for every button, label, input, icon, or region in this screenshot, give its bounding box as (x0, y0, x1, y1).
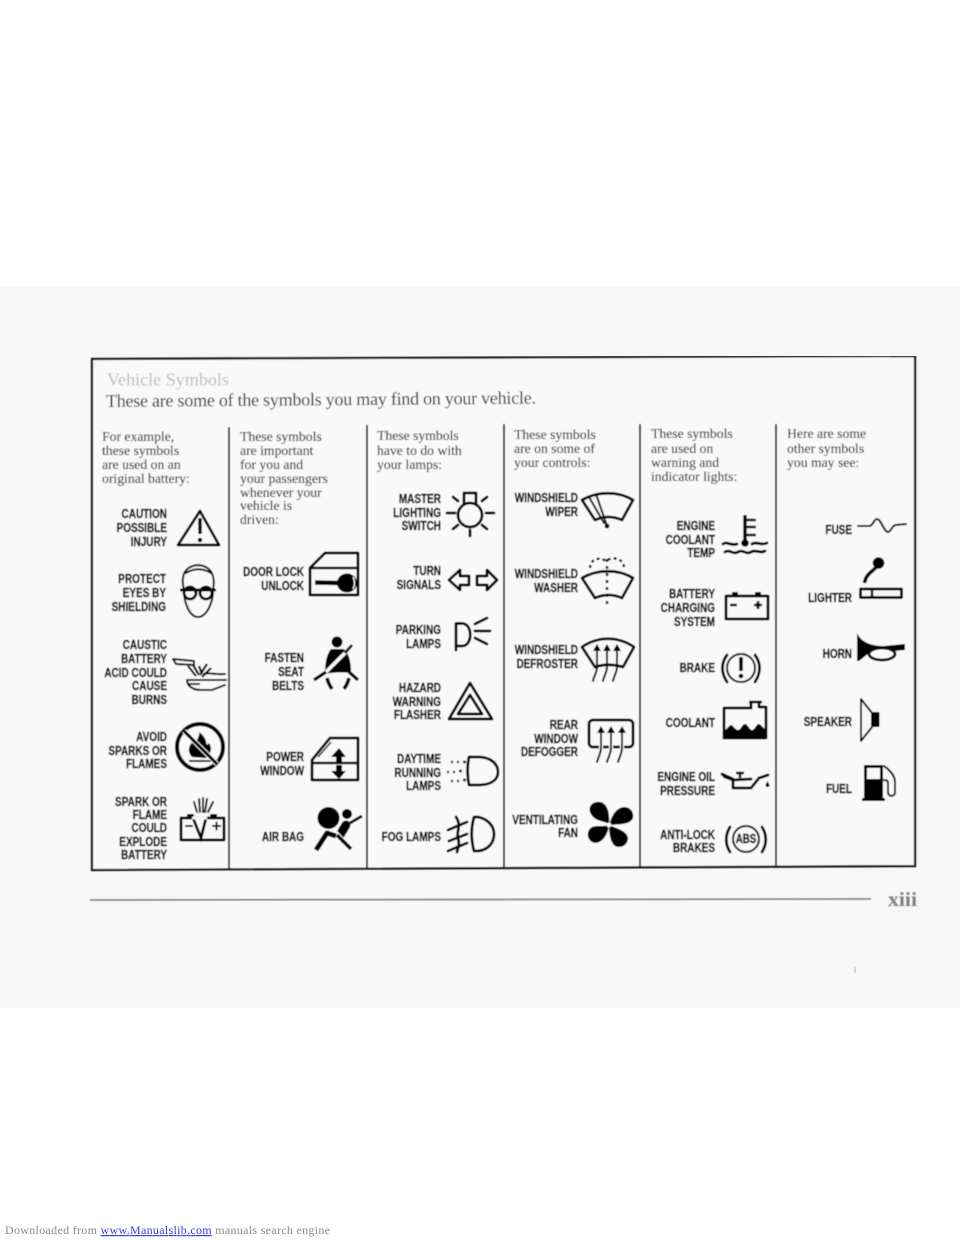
symbol: rear window defogger: REAR (550, 719, 578, 732)
symbol: caution possible injury: CAUTION (122, 508, 167, 521)
intro text: battery: these symbols (102, 443, 179, 458)
symbol: rear window defogger (521, 719, 633, 762)
symbol: windshield defroster (515, 639, 634, 681)
intro text: indicators: are used on (651, 441, 713, 456)
symbol: power window: POWER (266, 751, 304, 764)
symbol: hazard warning flasher: HAZARD (399, 682, 441, 695)
symbol: turn signals: TURN (413, 565, 441, 578)
symbol: avoid sparks or flames (108, 724, 223, 771)
intro text: occupant: for you and (240, 457, 303, 472)
symbol: windshield washer: WINDSHIELD (515, 568, 578, 581)
symbol: caustic battery acid: BURNS (132, 694, 167, 707)
symbol: anti-lock brakes: BRAKES (673, 842, 715, 855)
intro text: battery: are used on an (102, 457, 181, 472)
intro text: indicators: indicator lights: (651, 469, 737, 484)
symbol: anti-lock brakes (660, 826, 766, 855)
symbol: caustic battery acid: CAUSTIC (123, 639, 167, 652)
symbol: master lighting switch: SWITCH (402, 520, 441, 533)
symbol: windshield wiper: WIPER (545, 506, 578, 519)
symbol: engine coolant temp: COOLANT (666, 534, 715, 547)
symbol: turn signals: SIGNALS (397, 579, 441, 592)
intro text: other (787, 426, 866, 470)
intro text: other: you may see: (787, 455, 859, 470)
symbol: master lighting switch (393, 493, 494, 536)
scanned page background (0, 287, 960, 1008)
panel: indicator symbols (651, 426, 770, 855)
symbol: engine oil pressure: ENGINE OIL (657, 771, 715, 784)
symbol: air bag (262, 807, 362, 850)
symbol: spark or flame could explode battery: BATTERY (121, 849, 167, 862)
symbol: fasten seat belts: BELTS (272, 680, 304, 693)
symbol: hazard warning flasher: WARNING (393, 696, 441, 709)
symbol: windshield wiper: WINDSHIELD (515, 492, 578, 505)
intro text: lamps: have to do with (377, 443, 462, 458)
symbol: hazard warning flasher (393, 682, 492, 722)
intro text: occupant: whenever your (240, 485, 322, 500)
faded section heading: Vehicle Symbols (107, 370, 229, 390)
intro text: battery (102, 429, 190, 486)
intro text: occupant: driven: (240, 512, 279, 527)
intro text: controls (514, 427, 596, 470)
symbol: fasten seat belts (265, 636, 358, 693)
symbol: horn (823, 633, 905, 661)
symbol: horn: HORN (823, 648, 852, 661)
symbol: engine coolant temp (666, 515, 767, 560)
symbol: hazard warning flasher: FLASHER (394, 709, 441, 722)
symbol: daytime running lamps (394, 753, 498, 793)
symbol: door lock: UNLOCK (261, 580, 305, 593)
symbol: turn signals (397, 565, 497, 592)
symbol: fuel (826, 765, 895, 801)
symbol: fasten seat belts: FASTEN (265, 652, 304, 665)
symbol: avoid sparks or flames: FLAMES (126, 758, 167, 771)
symbol: windshield defroster: DEFROSTER (516, 658, 578, 671)
symbols panel frame (92, 356, 915, 870)
symbol: protect eyes: PROTECT (118, 573, 166, 586)
intro text: battery: original battery: (102, 471, 190, 486)
symbol: ventilating fan: VENTILATING (512, 814, 578, 827)
panel: lamp symbols (377, 428, 498, 852)
symbol: speaker: SPEAKER (804, 716, 852, 729)
page rule (90, 899, 871, 900)
symbol: ventilating fan (512, 802, 633, 847)
symbol: caution possible injury (117, 508, 219, 549)
intro text: controls: are on some of (514, 441, 595, 456)
symbol: spark or flame could explode battery (115, 796, 224, 862)
symbol: spark or flame could explode battery: SPARK OR (115, 796, 167, 809)
symbol: air bag: AIR BAG (262, 831, 304, 844)
symbol: door lock: DOOR LOCK (243, 566, 305, 579)
symbol: engine oil pressure (657, 771, 770, 798)
symbol: protect eyes (112, 565, 216, 617)
symbol: caustic battery acid: ACID COULD (104, 667, 167, 680)
footer download note: Downloaded from www.Manualslib.com manuals search engine (5, 1223, 330, 1237)
symbol: spark or flame could explode battery: COULD (132, 822, 167, 835)
symbol: lighter: LIGHTER (808, 592, 852, 605)
symbol: engine coolant temp: TEMP (687, 547, 715, 560)
symbol: parking lamps: LAMPS (406, 638, 441, 651)
intro text: indicators (651, 426, 737, 484)
panel: occupant symbols (240, 429, 362, 850)
intro text: lamps: your lamps: (377, 457, 442, 472)
symbol: fasten seat belts: SEAT (278, 666, 304, 679)
symbol: daytime running lamps: DAYTIME (397, 753, 441, 766)
symbol: caustic battery acid: CAUSE (132, 680, 167, 693)
symbol: battery charging system (661, 588, 768, 629)
intro text: indicators: These symbols (651, 426, 733, 441)
symbol: fuel: FUEL (826, 783, 852, 796)
panel: control symbols (512, 427, 634, 847)
symbol: anti-lock brakes: ANTI-LOCK (660, 829, 716, 842)
intro text: lamps (377, 428, 462, 472)
intro text: other: other symbols (787, 441, 864, 456)
symbol: engine oil pressure: PRESSURE (660, 785, 715, 798)
symbol: fuse (825, 519, 906, 537)
symbol: avoid sparks or flames: AVOID (136, 731, 167, 744)
symbol: caustic battery acid (104, 639, 226, 707)
symbol: brake: BRAKE (680, 662, 715, 675)
intro text: lamps: These symbols (377, 428, 459, 443)
intro text: controls: These symbols (514, 427, 596, 442)
symbol: ventilating fan: FAN (558, 827, 578, 840)
page number: xiii (888, 889, 917, 911)
intro text: occupant: These symbols (240, 429, 322, 444)
symbol: coolant: COOLANT (666, 717, 715, 730)
intro text: other: Here are some (787, 426, 866, 441)
intro text: occupant: vehicle is (240, 498, 292, 513)
symbol: fog lamps (382, 817, 494, 852)
symbol: anti-lock brakes: ABS (736, 833, 757, 846)
intro text: indicators: warning and (651, 455, 719, 470)
intro text: occupant: are important (240, 443, 314, 458)
symbol: door lock (243, 553, 358, 595)
intro text: occupant: your passengers (240, 471, 328, 486)
symbol: caustic battery acid: BATTERY (121, 653, 167, 666)
symbol: spark or flame could explode battery: EXPLODE (119, 836, 167, 849)
symbol: engine coolant temp: ENGINE (677, 520, 715, 533)
symbol: protect eyes: EYES BY (123, 587, 166, 600)
symbol: windshield wiper (515, 492, 633, 528)
symbol: windshield washer: WASHER (534, 582, 578, 595)
symbol: rear window defogger: WINDOW (534, 733, 578, 746)
symbol: battery charging system: SYSTEM (674, 616, 715, 629)
symbol: caution possible injury: POSSIBLE (117, 522, 167, 535)
symbol: caution possible injury: INJURY (131, 536, 167, 549)
symbol: power window (260, 738, 358, 780)
symbol: fuse: FUSE (825, 524, 852, 537)
symbol: speaker (804, 699, 880, 741)
symbol: lighter (808, 557, 902, 605)
symbol: master lighting switch: MASTER (399, 493, 441, 506)
symbol: battery charging system: CHARGING (661, 602, 715, 615)
main heading sentence: These are some of the symbols you may find on your vehicle. (106, 388, 536, 411)
symbol: brake (680, 654, 760, 682)
symbol: coolant (666, 702, 766, 738)
intro text: battery: For example, (102, 429, 174, 444)
symbol: battery charging system: BATTERY (669, 588, 715, 601)
symbol: protect eyes: SHIELDING (112, 601, 166, 614)
symbol: windshield washer (515, 558, 633, 604)
symbol: avoid sparks or flames: SPARKS OR (108, 745, 167, 758)
symbol: spark or flame could explode battery: FLAME (133, 809, 167, 822)
symbol: parking lamps (396, 618, 490, 651)
symbol: parking lamps: PARKING (396, 624, 441, 637)
panel: battery symbols (102, 429, 226, 862)
symbol: daytime running lamps: RUNNING (394, 767, 441, 780)
symbol: power window: WINDOW (260, 765, 304, 778)
symbol: fog lamps: FOG LAMPS (382, 831, 441, 844)
intro text: controls: your controls: (514, 455, 590, 470)
symbol: master lighting switch: LIGHTING (393, 507, 441, 520)
panel: other symbols (787, 426, 906, 801)
intro text: occupant (240, 429, 328, 527)
symbol: daytime running lamps: LAMPS (406, 780, 441, 793)
stray scan mark (854, 967, 856, 973)
symbol: windshield defroster: WINDSHIELD (515, 644, 578, 657)
symbol: rear window defogger: DEFOGGER (521, 746, 578, 759)
